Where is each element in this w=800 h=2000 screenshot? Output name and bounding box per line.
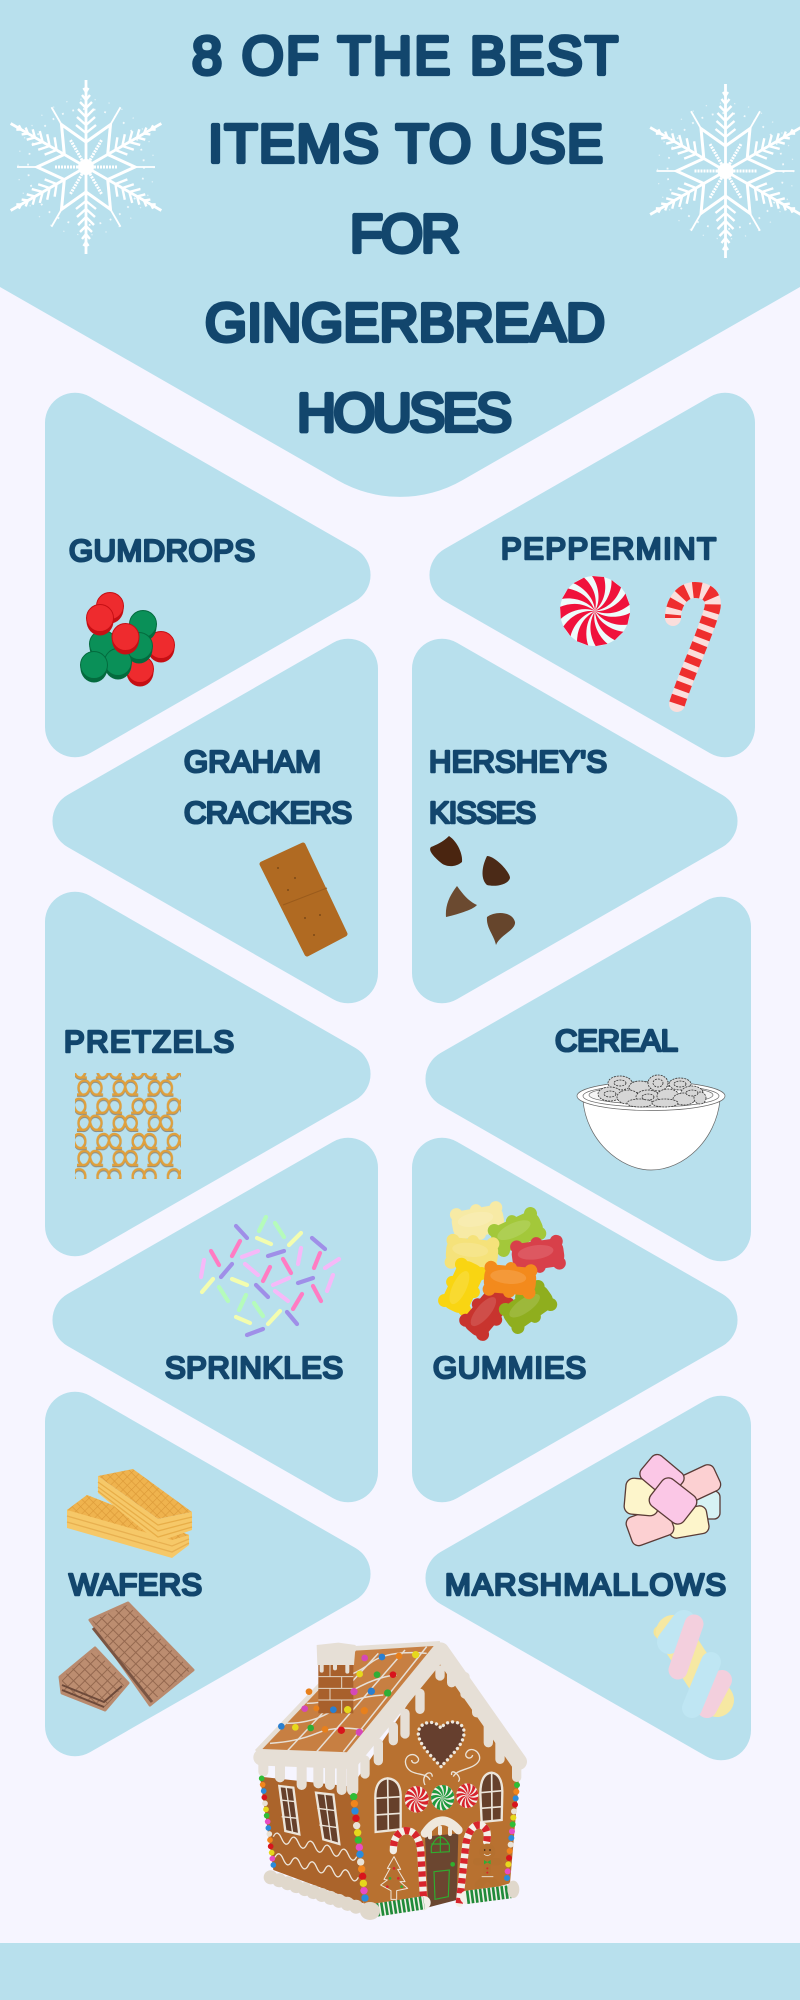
heading: hershey's kisses: HERSHEY'S [429,744,607,779]
icon: marshmallow pile [623,1452,723,1548]
gingerbread man [477,1844,498,1885]
icon: peppermint swirl [559,576,631,647]
icon: gumdrops [80,592,174,686]
heading: gummies: GUMMIES [433,1350,586,1385]
heading: gumdrops: GUMDROPS [69,533,255,568]
panel: gummies [412,1138,738,1502]
wall piping [273,1833,358,1881]
heading: hershey's kisses: KISSES [429,795,536,830]
heading: sprinkles: SPRINKLES [165,1350,343,1385]
house walls [260,1657,520,1907]
bottom band [0,1943,800,2000]
icon: sprinkles [201,1217,339,1335]
icon: gingerbread house [257,1643,520,1920]
icon: gummy bears [435,1200,567,1344]
heart [418,1722,464,1767]
heading: marshmallows: MARSHMALLOWS [445,1567,726,1602]
door [425,1821,458,1907]
heading: peppermint: PEPPERMINT [501,531,716,566]
heading: graham crackers: GRAHAM [184,744,321,779]
title [192,26,618,443]
panel: peppermint [429,393,755,757]
icon: pretzel pattern [75,1073,181,1179]
icing base [271,1877,519,1920]
title: HOUSES [297,383,512,443]
heading: wafers: WAFERS [69,1567,202,1602]
title: ITEMS TO USE [208,114,603,174]
heading: hershey's kisses [429,744,607,830]
candies [404,1783,479,1813]
roof lights [278,1651,419,1736]
icon: chocolate kisses [430,836,515,945]
panel: wafers [45,1392,371,1756]
icon: golden wafers [67,1469,192,1558]
header banner [0,0,800,497]
heading: cereal: CEREAL [555,1023,678,1058]
heading: graham crackers: CRACKERS [184,795,352,830]
front windows [375,1773,502,1832]
cookie tree [381,1857,408,1899]
bead columns [259,1775,520,1902]
candy ropes [377,1892,511,1910]
piped swirls [405,1750,480,1785]
panel: gumdrops [45,393,371,757]
title: FOR [350,204,460,264]
title: 8 OF THE BEST [192,26,618,86]
panel: pretzels [45,892,371,1256]
roof [257,1643,440,1753]
icon: chocolate wafers [60,1603,193,1710]
left wall windows [279,1786,339,1844]
icon: cereal bowl [577,1075,725,1170]
panel: sprinkles [52,1138,378,1502]
panel: hershey's kisses [412,639,738,1003]
panel: cereal [425,897,751,1261]
heading: graham crackers [184,744,352,830]
icon: left snowflake [6,80,166,254]
icon: candy cane [673,590,713,704]
icon: graham cracker [262,845,345,954]
chimney [317,1643,356,1713]
icon: twisted marshmallow [660,1622,726,1708]
panel: marshmallows [425,1396,751,1760]
title: GINGERBREAD [205,293,605,353]
candy canes [393,1825,487,1907]
panel: graham crackers [52,639,378,1003]
icing trim [262,1651,519,1790]
icon: right snowflake [645,84,800,258]
heading: pretzels: PRETZELS [64,1024,234,1059]
